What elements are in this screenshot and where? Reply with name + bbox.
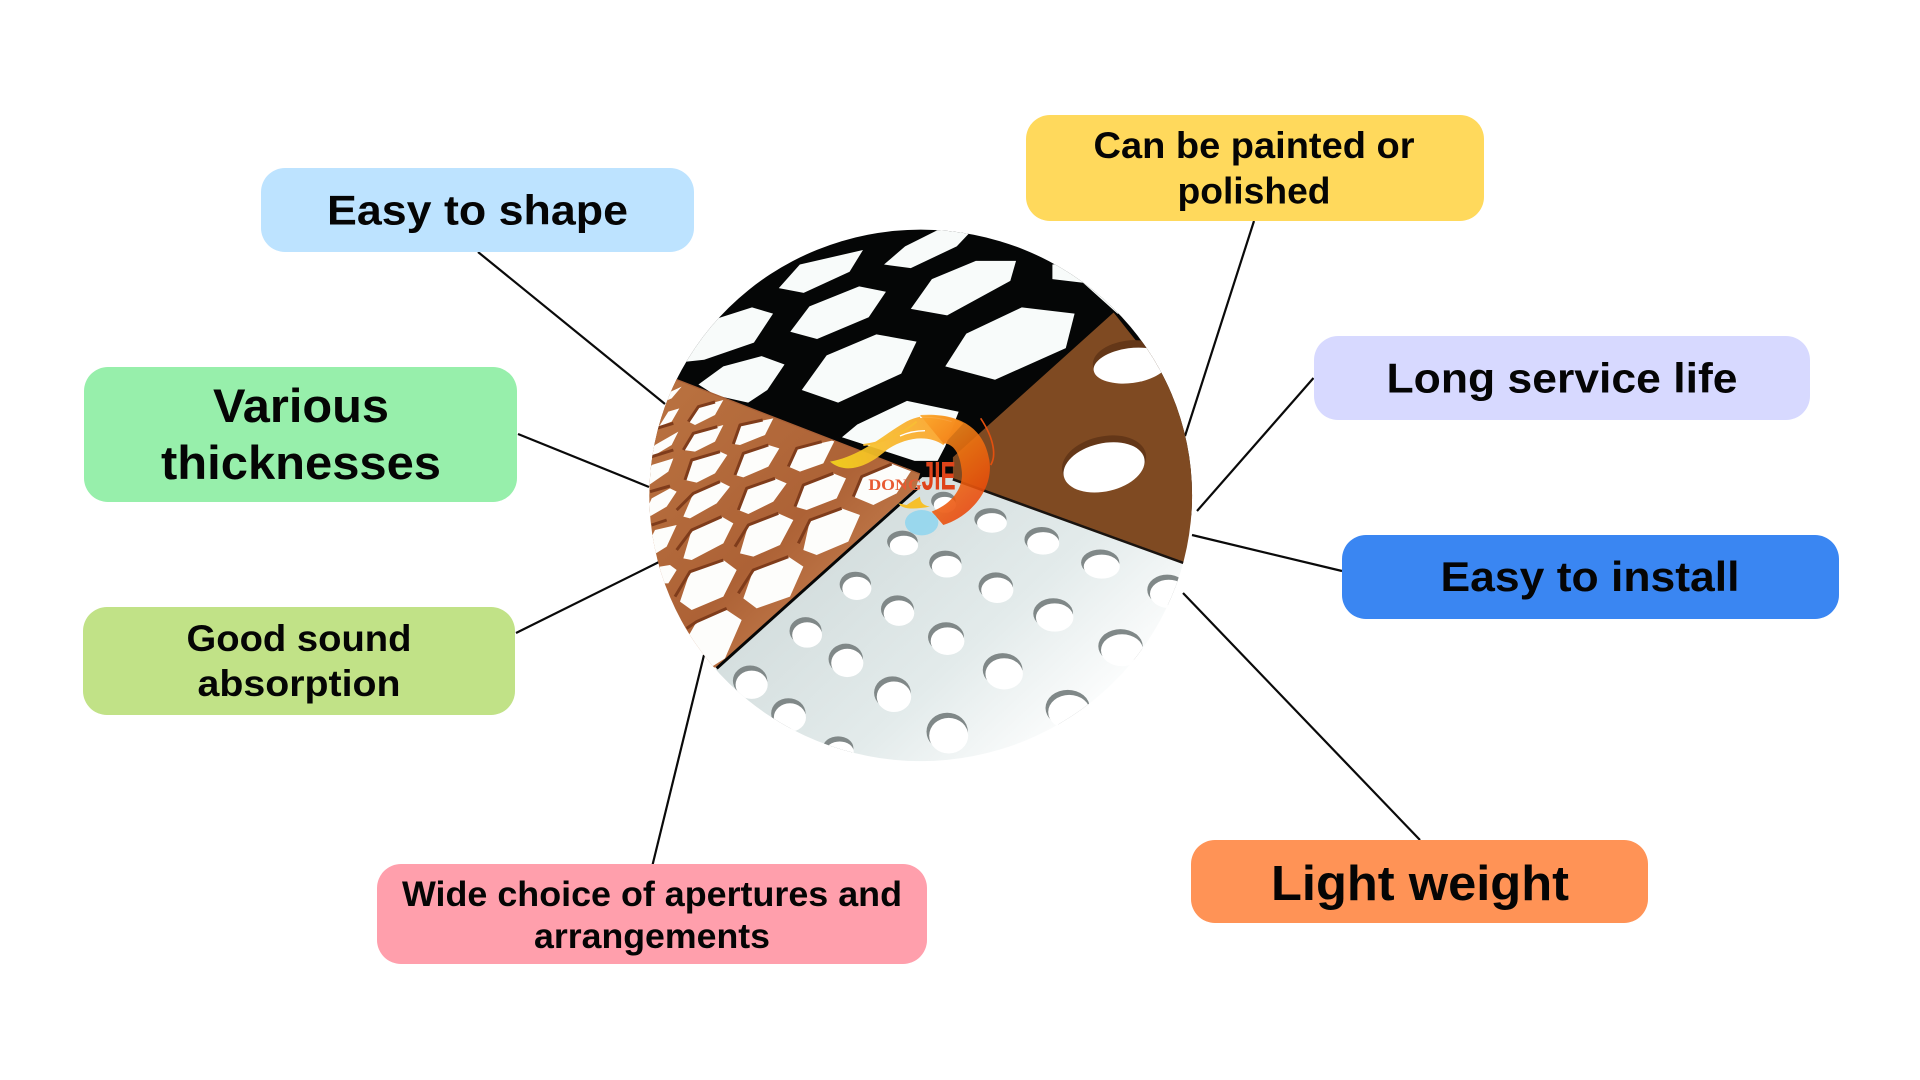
label: easy to shape: Easy to shape xyxy=(327,186,628,234)
copper hexagon sector xyxy=(640,379,920,670)
connector: easy to install xyxy=(1192,535,1342,571)
label: long service life: Long service life xyxy=(1386,354,1738,402)
connector: long service life xyxy=(1197,378,1314,511)
blue wave mark xyxy=(905,510,938,535)
label: can be painted or polished xyxy=(1026,115,1484,221)
infographic canvas xyxy=(83,115,1839,964)
flame swoosh xyxy=(830,415,963,468)
connector: easy to shape xyxy=(478,252,665,404)
connector: painted or polished xyxy=(1185,221,1254,436)
watermark logo: JIE xyxy=(922,454,956,498)
connector: various thicknesses xyxy=(518,434,649,487)
central photo disc of perforated metal xyxy=(640,225,1217,777)
label: can be painted or polished: polished xyxy=(1178,170,1330,212)
connector: good sound absorption xyxy=(516,562,659,633)
label: can be painted or polished: Can be painted or xyxy=(1094,125,1414,166)
connector: light weight xyxy=(1183,593,1420,840)
label: various thicknesses xyxy=(84,367,517,502)
label: easy to install: Easy to install xyxy=(1440,553,1740,600)
watermark logo xyxy=(830,415,994,535)
aluminium round-hole sector xyxy=(716,477,1182,761)
copper groove shadows xyxy=(650,402,892,628)
label: wide choice of apertures and arrangements: Wide choice of apertures and xyxy=(402,875,902,914)
label: long service life xyxy=(1314,336,1810,420)
connector: wide choice xyxy=(652,655,704,865)
label: various thicknesses: thicknesses xyxy=(161,436,441,489)
label: good sound absorption: absorption xyxy=(198,663,400,704)
logo wordmark: DONG xyxy=(868,477,922,494)
black hexagon sheet xyxy=(643,225,1202,515)
label: easy to install xyxy=(1342,535,1839,619)
brown perforated sector xyxy=(953,313,1205,572)
copper hole openings xyxy=(647,387,912,670)
label: good sound absorption: Good sound xyxy=(186,618,412,659)
label: easy to shape xyxy=(261,168,694,252)
label: wide choice of apertures and arrangements: arrangements xyxy=(534,917,770,956)
copper to aluminium seam xyxy=(717,488,917,668)
label: light weight xyxy=(1191,840,1648,923)
label: various thicknesses: Various xyxy=(213,379,389,432)
orange arc xyxy=(920,415,990,525)
label: wide choice of apertures and arrangements xyxy=(377,864,927,964)
label: good sound absorption xyxy=(83,607,515,715)
label: light weight: Light weight xyxy=(1271,857,1569,911)
